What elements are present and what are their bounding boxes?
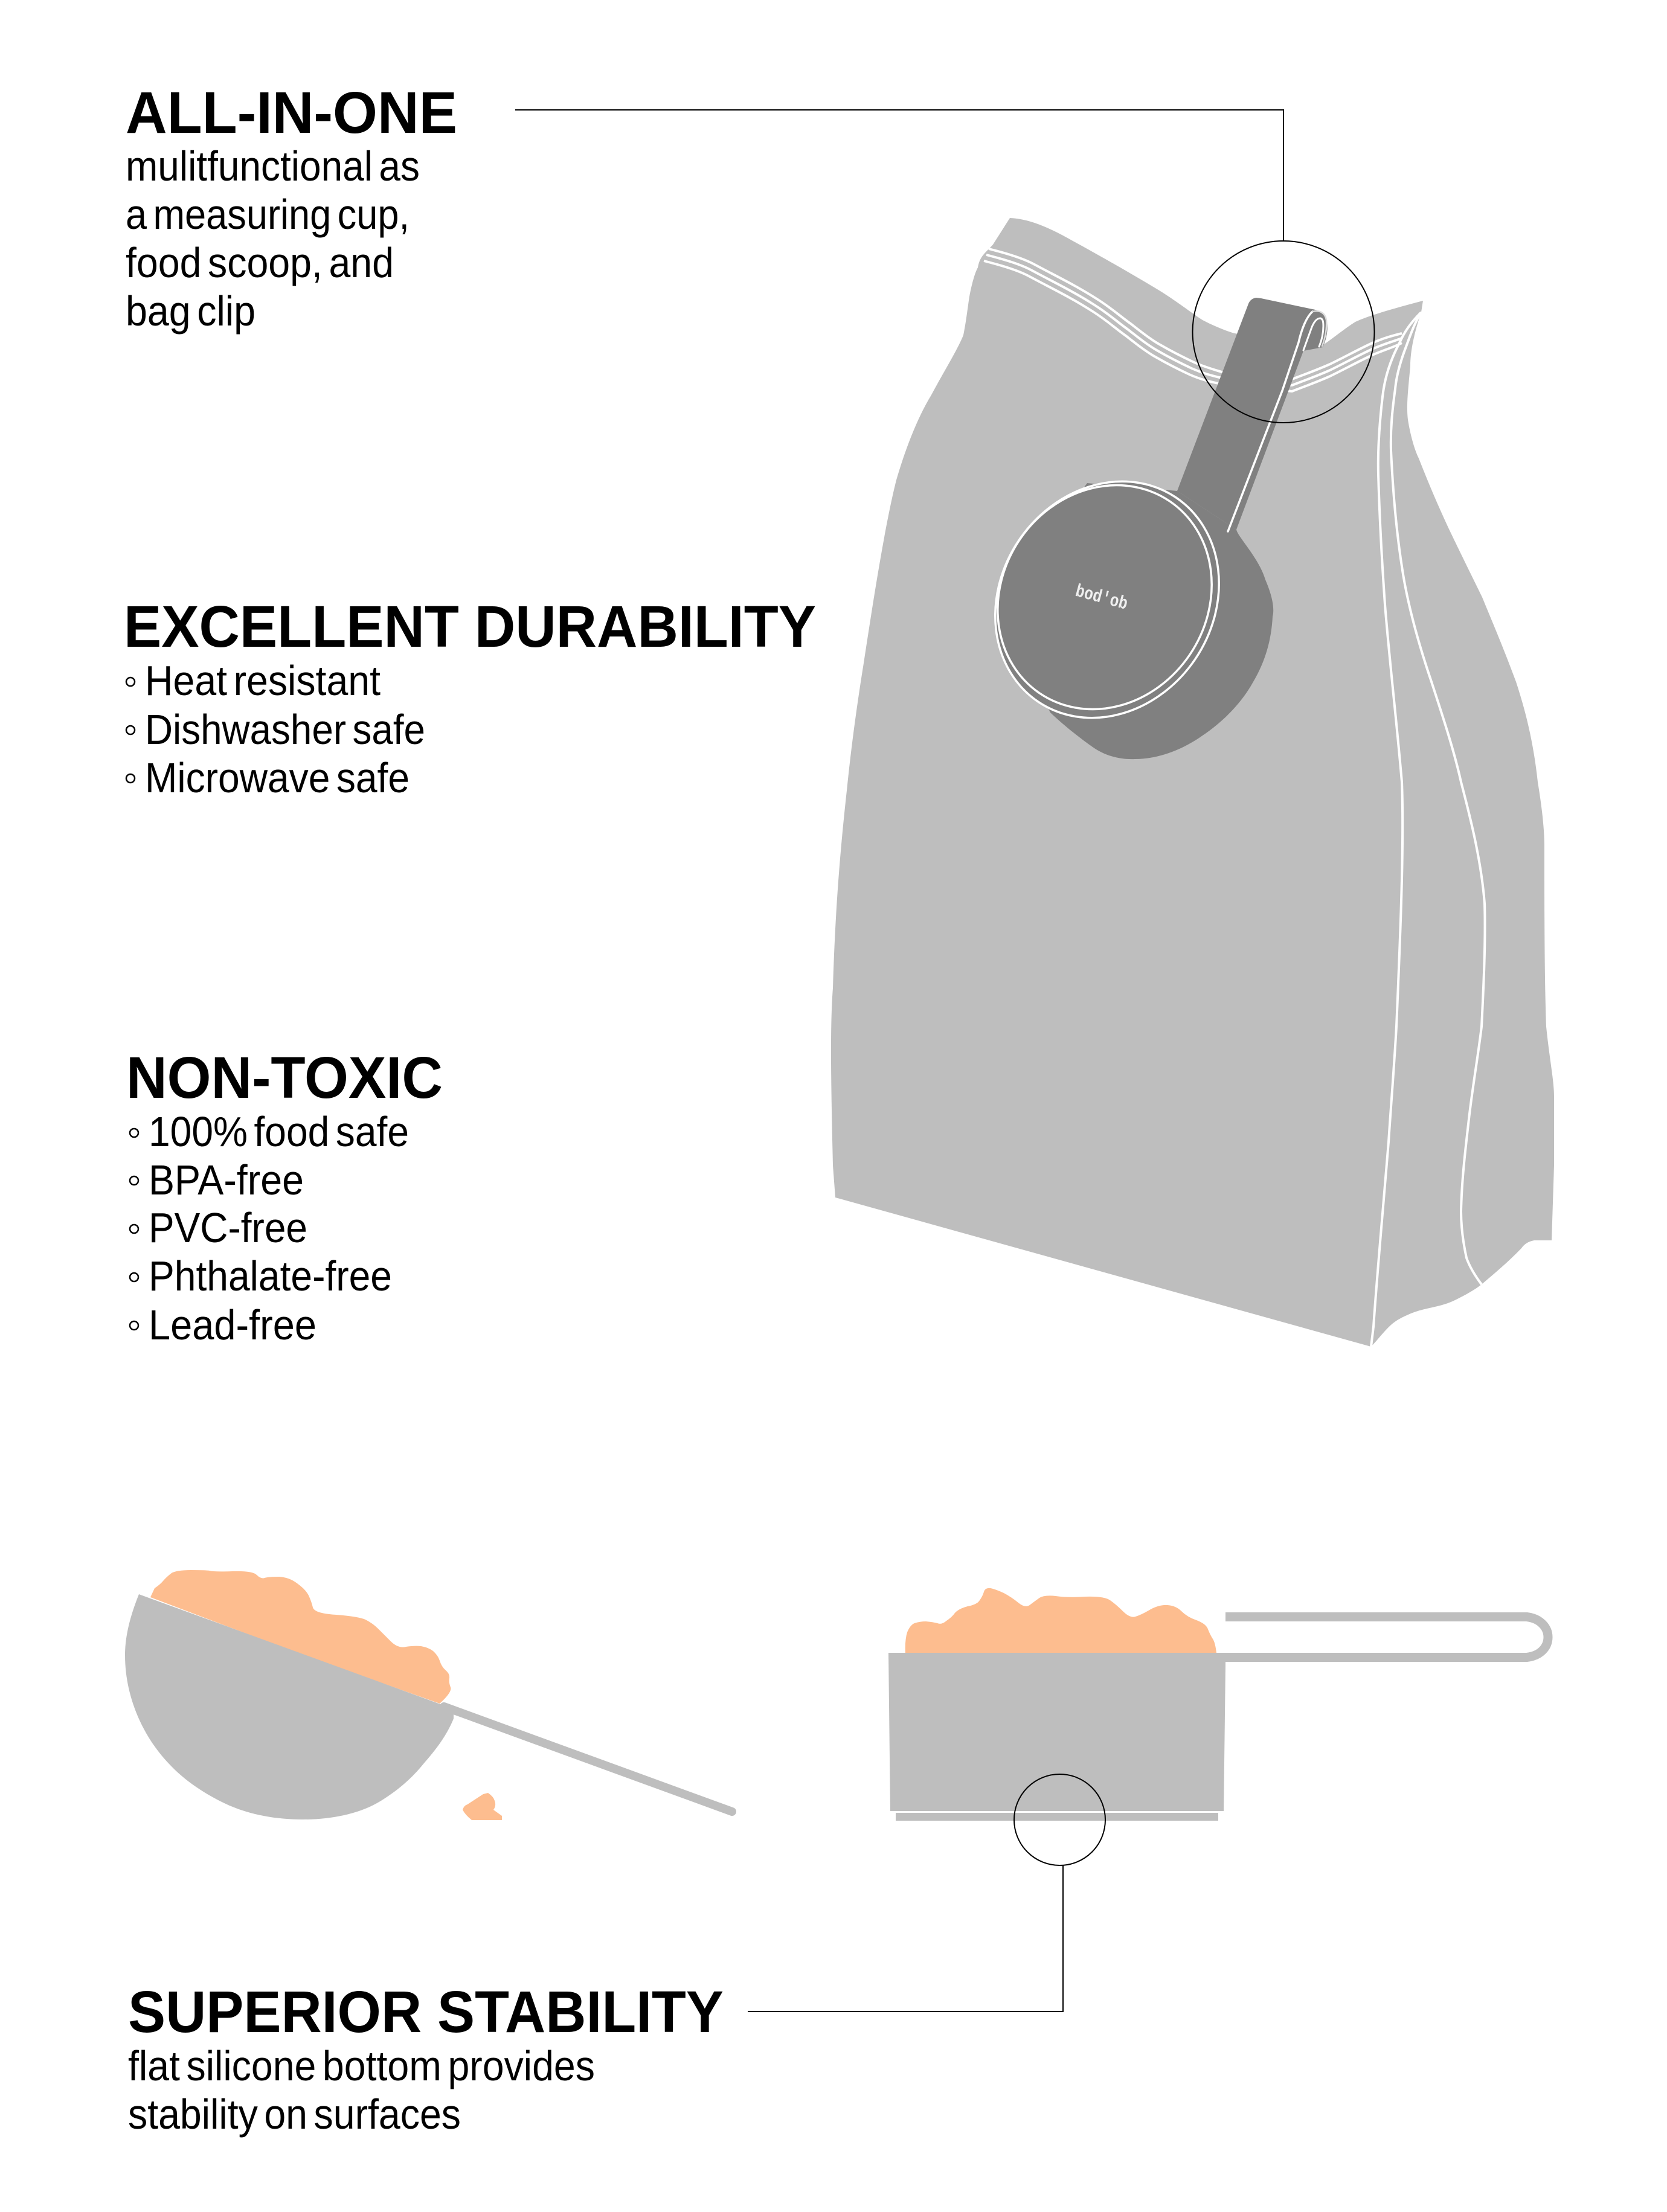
heading and list: non-toxic: BPA-free (149, 1156, 304, 1204)
heading and list: non-toxic: 100% food safe (149, 1108, 409, 1155)
heading and list: non-toxic (126, 1045, 443, 1348)
scoop bowl (125, 1594, 454, 1819)
heading and text: all-in-one (126, 80, 457, 335)
food mound (150, 1570, 451, 1704)
scoop disk with double rim (950, 438, 1264, 761)
illustration: bag with clipped scoop (831, 218, 1554, 1347)
scoop cup body (997, 483, 1273, 759)
bag seal lines (984, 249, 1402, 391)
illustration: upright scoop on surface (888, 1588, 1548, 1821)
heading and text: superior stability: SUPERIOR STABILITY (128, 1979, 724, 2045)
scoop logo: bod'ob (1073, 582, 1129, 615)
callout: all-in-one leader and circle (515, 110, 1375, 423)
heading and list: non-toxic: Lead-free (149, 1301, 316, 1348)
heading and list: non-toxic: NON-TOXIC (126, 1045, 443, 1111)
heading and list: non-toxic: Phthalate-free (149, 1252, 392, 1300)
heading and text: all-in-one: ALL-IN-ONE (126, 80, 457, 146)
heading and text: superior stability: flat silicone bottom provides (128, 2042, 595, 2089)
heading and list: excellent durability: Dishwasher safe (145, 706, 425, 753)
heading and list: excellent durability: Microwave safe (145, 754, 410, 801)
scoop handle clip (1177, 298, 1328, 530)
heading and text: all-in-one: mulitfunctional as (126, 143, 420, 190)
heading and text: all-in-one: food scoop, and (126, 239, 394, 286)
clip highlight lines (1228, 311, 1326, 531)
bag body (831, 218, 1554, 1347)
silicone base (896, 1813, 1218, 1821)
scoop handle (1220, 1617, 1548, 1657)
heading and text: all-in-one: a measuring cup, (126, 191, 410, 238)
bag gusset fold lines (1371, 312, 1485, 1347)
heading and list: excellent durability: EXCELLENT DURABILITY (124, 594, 816, 659)
spilled crumb (463, 1793, 502, 1820)
heading and text: superior stability: stability on surfaces (128, 2091, 461, 2138)
food mound (905, 1588, 1216, 1653)
callout: superior stability leader and circle (748, 1774, 1105, 2012)
heading and list: excellent durability (124, 594, 816, 801)
scoop handle (444, 1707, 732, 1812)
heading and list: excellent durability: Heat resistant (145, 657, 381, 704)
illustration: tilted scoop spilling food (125, 1570, 732, 1820)
heading and text: all-in-one: bag clip (126, 287, 255, 335)
scoop body (888, 1653, 1225, 1811)
heading and list: non-toxic: PVC-free (149, 1204, 307, 1251)
heading and text: superior stability (128, 1979, 724, 2138)
